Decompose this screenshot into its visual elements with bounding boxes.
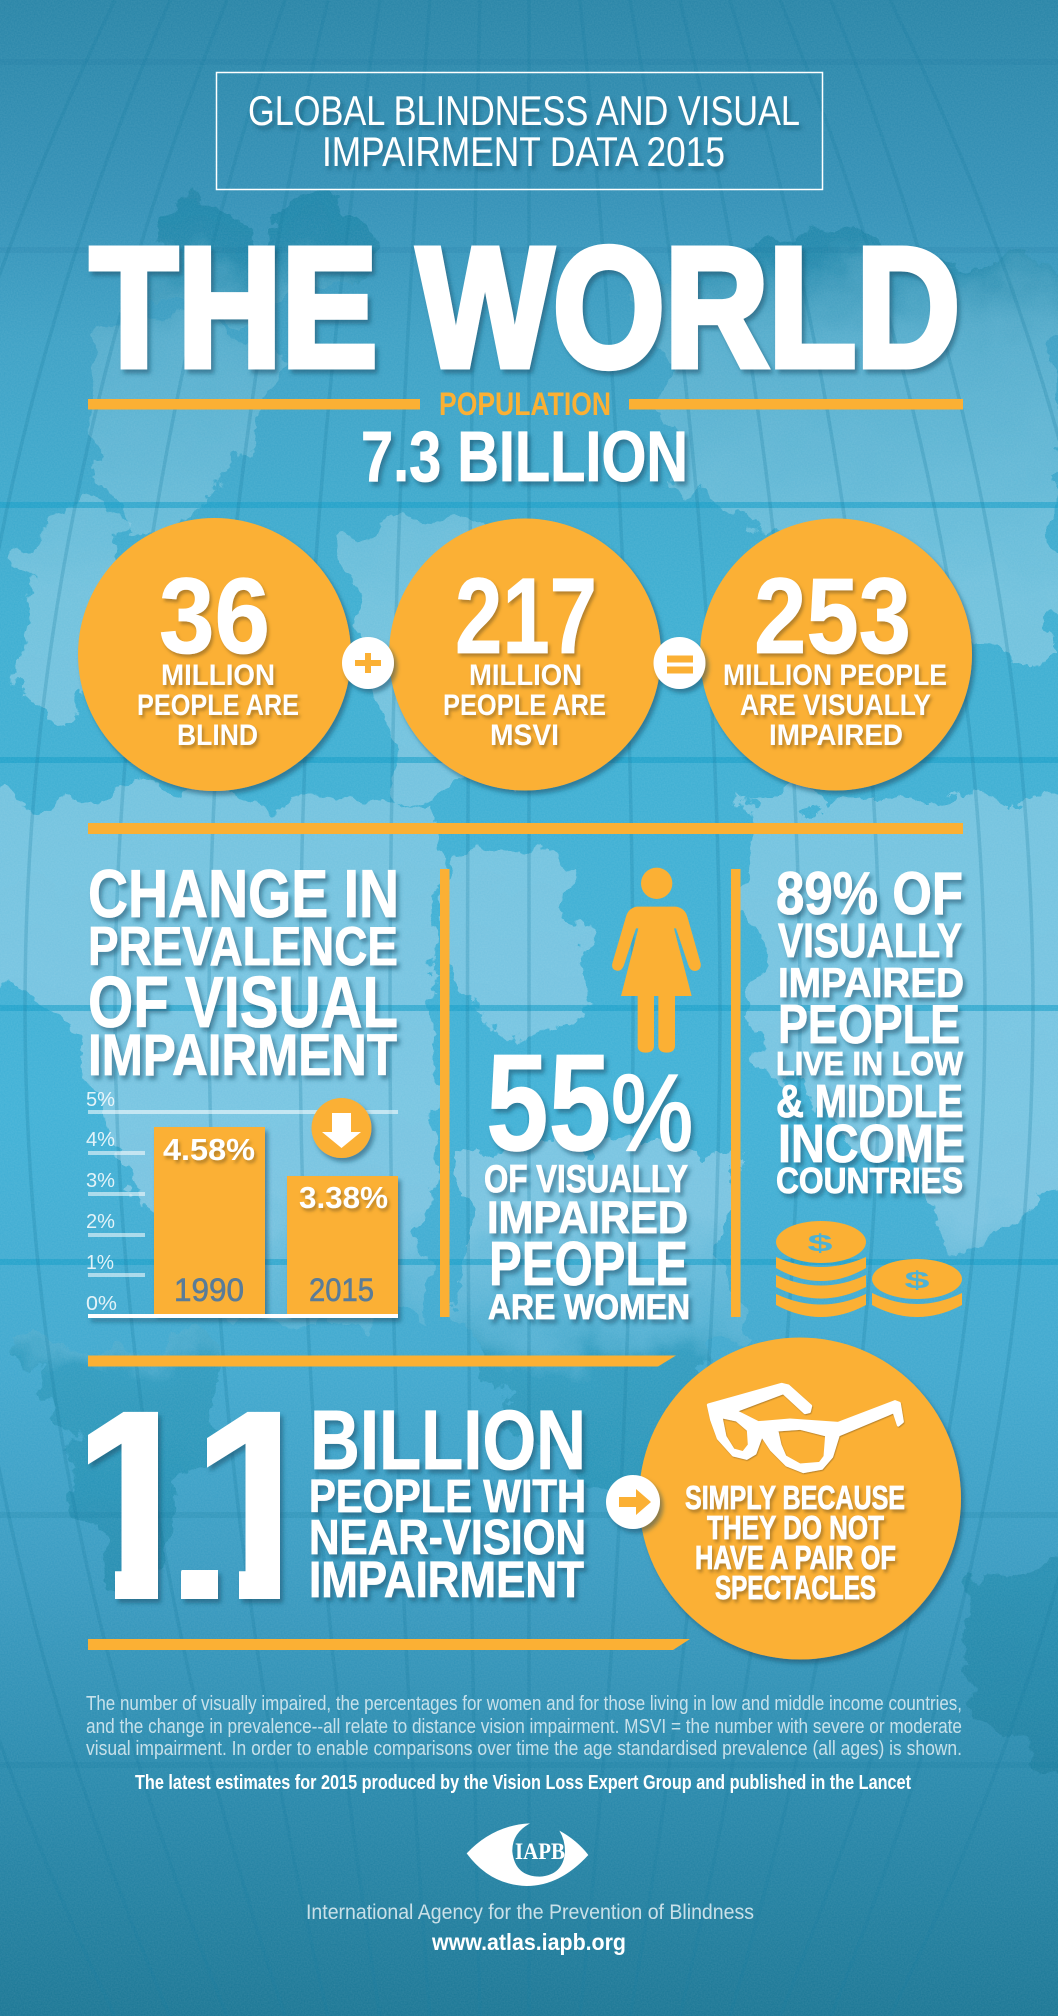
bar chart: 1% [86, 1252, 114, 1274]
circle: 36 million blind: PEOPLE ARE [137, 689, 299, 722]
stat: 55% women: IMPAIRED [487, 1192, 688, 1243]
bar chart: 3% [86, 1170, 115, 1192]
title box: GLOBAL BLINDNESS AND VISUAL [248, 87, 800, 134]
heading: change in prevalence [88, 856, 399, 1088]
bar chart: 2% [86, 1211, 115, 1233]
bar chart: 4% [86, 1129, 115, 1151]
stat: 55% women: % [611, 1052, 693, 1173]
circle: 217 million MSVI: 217 [455, 555, 597, 676]
bar chart [86, 1089, 398, 1318]
stat: 89% low and middle income: PEOPLE [778, 993, 960, 1055]
stat: 1.1 billion: PEOPLE WITH [309, 1470, 586, 1522]
circle: 217 million MSVI [389, 518, 661, 790]
heading: change in prevalence: OF VISUAL [88, 963, 398, 1043]
stat: 55% women: ARE WOMEN [488, 1288, 690, 1327]
stat: 1.1 billion [88, 1410, 589, 1605]
icon: equals [654, 637, 706, 689]
circle: spectacles: SIMPLY BECAUSE [685, 1479, 905, 1516]
circle: 217 million MSVI: MSVI [490, 719, 559, 752]
circle: spectacles [639, 1338, 961, 1660]
agency name: International Agency for the Prevention of Blindness [306, 1901, 754, 1924]
circle: spectacles: HAVE A PAIR OF [695, 1539, 896, 1576]
circle: 253 million visually impaired: ARE VISUALLY [740, 689, 931, 722]
stat: 89% low and middle income: & MIDDLE [776, 1075, 963, 1127]
stat: 89% low and middle income: COUNTRIES [776, 1160, 963, 1201]
icon: woman [612, 868, 701, 1053]
stat: 89% low and middle income: 89% OF [776, 860, 963, 927]
bar chart: 5% [86, 1089, 115, 1111]
stat: 55% women: PEOPLE [489, 1230, 688, 1299]
circle: spectacles: SPECTACLES [715, 1569, 876, 1606]
circle: 36 million blind: BLIND [177, 719, 258, 752]
circle: 253 million visually impaired: MILLION PEOPLE [723, 659, 947, 692]
footnote [86, 1693, 962, 1760]
circle: 253 million visually impaired [700, 518, 972, 790]
population: POPULATION [439, 386, 611, 422]
circle: 253 million visually impaired: 253 [754, 555, 911, 676]
vertical divider left [440, 869, 450, 1317]
bar chart: 3.38% [299, 1180, 388, 1215]
icon: coins [776, 1221, 962, 1317]
icon: coins: $ [904, 1266, 930, 1293]
stat: 89% low and middle income [776, 860, 965, 1201]
circle: 217 million MSVI: PEOPLE ARE [443, 689, 606, 722]
icon: right arrow [606, 1475, 660, 1529]
icon: glasses [708, 1384, 902, 1472]
stat: 1.1 billion: 1.1 [58, 1353, 333, 1657]
lower slanted bar [88, 1639, 690, 1650]
circle: 253 million visually impaired: IMPAIRED [769, 719, 903, 752]
population: 7.3 BILLION [361, 418, 688, 497]
icon: coins: $ [807, 1229, 833, 1256]
title box: IMPAIRMENT DATA 2015 [322, 128, 725, 175]
stat: 1.1 billion: IMPAIRMENT [309, 1551, 584, 1608]
bar chart: 0% [86, 1293, 117, 1315]
circle: 36 million blind [78, 518, 351, 791]
stat: 89% low and middle income: IMPAIRED [778, 959, 964, 1006]
stat: 55% women [484, 1026, 693, 1327]
circle: 36 million blind: MILLION [161, 659, 275, 692]
heading: change in prevalence: PREVALENCE [88, 915, 398, 977]
vertical divider right [731, 869, 740, 1317]
icon: plus [342, 637, 394, 689]
heading: change in prevalence: CHANGE IN [88, 856, 399, 932]
logo: IAPB eye: IAPB [515, 1839, 565, 1864]
circle: spectacles: THEY DO NOT [707, 1509, 884, 1546]
stat: 1.1 billion: BILLION [310, 1393, 586, 1487]
stat: 1.1 billion: NEAR-VISION [309, 1511, 586, 1565]
stat: 55% women: OF VISUALLY [484, 1158, 688, 1201]
bar chart: 1990 [174, 1272, 244, 1308]
population [88, 386, 963, 497]
circle: 217 million MSVI: MILLION [469, 659, 582, 692]
bar chart: 4.58% [163, 1132, 255, 1167]
top slanted bar [88, 1356, 676, 1366]
title box [216, 72, 822, 190]
circle: 36 million blind: 36 [159, 555, 270, 676]
stat: 89% low and middle income: LIVE IN LOW [776, 1045, 964, 1082]
stat: 55% women: 55 [486, 1026, 611, 1180]
website: www.atlas.iapb.org [431, 1929, 626, 1955]
stat: 89% low and middle income: VISUALLY [778, 915, 962, 968]
logo: IAPB eye [467, 1823, 588, 1886]
divider bar [88, 823, 963, 834]
icon: down arrow [312, 1098, 372, 1158]
heading: change in prevalence: IMPAIRMENT [88, 1023, 397, 1088]
stat: 89% low and middle income: INCOME [778, 1114, 965, 1174]
bar chart: 2015 [309, 1272, 374, 1308]
